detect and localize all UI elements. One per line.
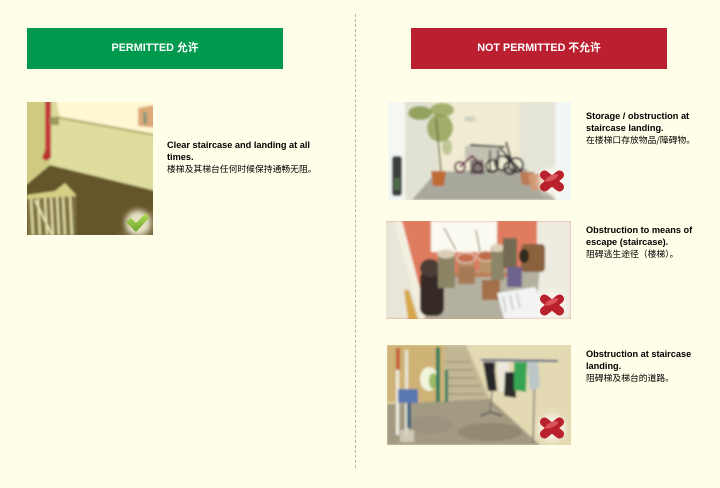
caption: obstruction at staircase landing: Obstruction at staircase landing. (586, 349, 691, 370)
icon: red cross (538, 291, 566, 319)
photo: pots blocking the staircase (386, 221, 571, 319)
caption: storage obstruction: 在楼梯口存放物品/障碍物。 (586, 133, 695, 146)
divider (355, 14, 356, 468)
caption: clear staircase: Clear staircase and landing at all times. (167, 140, 310, 162)
caption: storage obstruction (586, 111, 695, 146)
heading: permitted (27, 28, 283, 69)
icon: red cross (538, 167, 566, 195)
caption: obstruction to means of escape: Obstruction to means of escape (staircase). (586, 225, 692, 246)
heading: not permitted: NOT PERMITTED 不允许 (477, 42, 601, 54)
caption: obstruction at staircase landing (586, 349, 691, 384)
heading: permitted: PERMITTED 允许 (112, 42, 198, 54)
icon: red cross (538, 414, 566, 442)
caption: clear staircase (167, 140, 317, 175)
panel: not permitted (386, 28, 695, 445)
panel: permitted (27, 28, 317, 235)
caption: obstruction to means of escape (586, 225, 692, 260)
caption: obstruction to means of escape: 阻碍逃生途径（楼梯）。 (586, 247, 678, 260)
photo: laundry rack on staircase landing (387, 345, 571, 445)
photo: bicycles and plant on landing (388, 102, 571, 200)
photo: clear staircase with green tick (27, 102, 153, 235)
icon: green tick (125, 210, 151, 236)
caption: obstruction at staircase landing: 阻碍梯及梯台的道路。 (586, 371, 674, 384)
heading: not permitted (411, 28, 667, 69)
caption: clear staircase: 楼梯及其梯台任何时候保持通畅无阻。 (167, 162, 317, 175)
caption: storage obstruction: Storage / obstruction at staircase landing. (586, 111, 689, 132)
